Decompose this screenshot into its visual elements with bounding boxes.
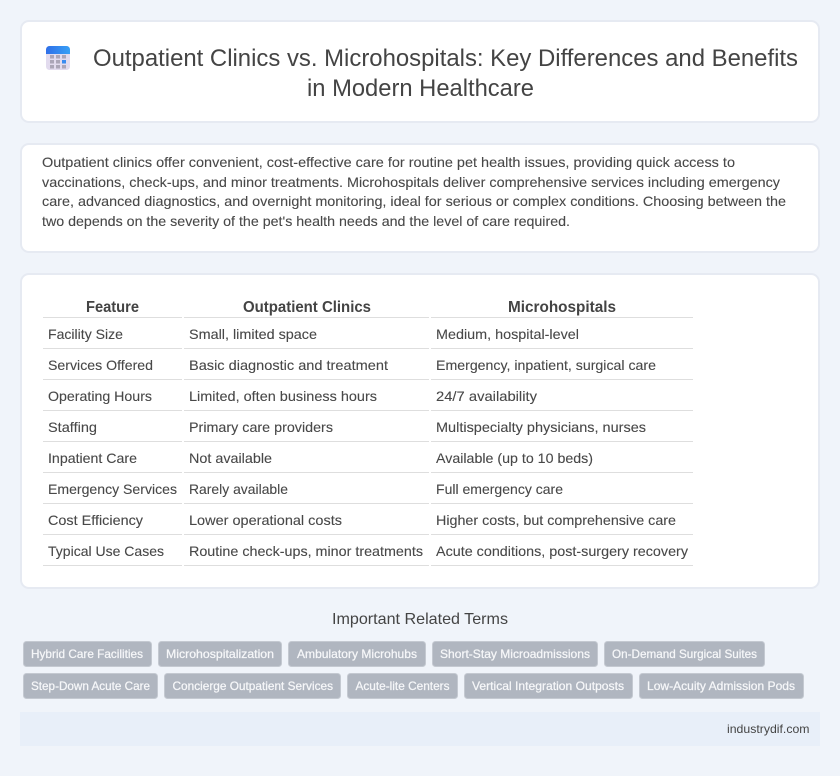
title text: in Modern Healthcare — [307, 75, 534, 102]
row: cost efficiency: Lower operational costs — [189, 512, 342, 528]
tag — [24, 674, 158, 698]
panel: title — [21, 21, 819, 122]
table header: Microhospitals — [508, 299, 616, 316]
row: typical use cases — [43, 543, 693, 566]
row: facility size — [43, 326, 693, 349]
panel: comparison table — [21, 274, 819, 588]
tag — [24, 642, 152, 666]
tag: Hybrid Care Facilities — [31, 647, 143, 661]
table header: Feature — [86, 299, 139, 316]
tag — [348, 674, 458, 698]
title text — [93, 45, 798, 102]
heading: important related terms: Important Related Terms — [332, 611, 508, 628]
panel: description — [21, 144, 819, 252]
description text — [42, 154, 786, 229]
row: operating hours — [43, 388, 693, 411]
row: operating hours: 24/7 availability — [436, 388, 537, 404]
tag: Microhospitalization — [166, 647, 274, 661]
row: services offered — [43, 357, 693, 380]
row: staffing: Staffing — [48, 419, 97, 435]
tag: On-Demand Surgical Suites — [612, 647, 757, 661]
tag: Ambulatory Microhubs — [297, 647, 417, 661]
row: cost efficiency: Higher costs, but comprehensive care — [436, 512, 676, 528]
row: operating hours: Operating Hours — [48, 388, 152, 404]
row: operating hours: Limited, often business hours — [189, 388, 377, 404]
tag — [464, 674, 632, 698]
row: staffing — [43, 419, 693, 442]
row: inpatient care: Not available — [189, 450, 272, 466]
tag — [158, 642, 282, 666]
tag — [288, 642, 426, 666]
row: emergency services — [43, 481, 693, 504]
row: inpatient care: Inpatient Care — [48, 450, 137, 466]
tag — [164, 674, 340, 698]
description text: two depends on the severity of the pet's health needs and the level of care required. — [42, 213, 570, 229]
row: typical use cases: Typical Use Cases — [48, 543, 164, 559]
row: services offered: Emergency, inpatient, surgical care — [436, 357, 656, 373]
footer: industrydif.com — [727, 722, 810, 736]
row: facility size: Small, limited space — [189, 326, 317, 342]
row: typical use cases: Acute conditions, post-surgery recovery — [436, 543, 688, 559]
icon: calendar — [46, 46, 70, 70]
tag: Acute-lite Centers — [356, 679, 450, 693]
row: emergency services: Rarely available — [189, 481, 288, 497]
row: emergency services: Full emergency care — [436, 481, 563, 497]
tag: Concierge Outpatient Services — [172, 679, 333, 693]
row: staffing: Multispecialty physicians, nurses — [436, 419, 646, 435]
tag — [604, 642, 764, 666]
tag: Step-Down Acute Care — [31, 679, 150, 693]
description text: care, advanced diagnostics, and overnight monitoring, ideal for serious or complex conditions. Choosing between the — [42, 193, 786, 209]
table header: Outpatient Clinics — [243, 299, 371, 316]
description text: Outpatient clinics offer convenient, cost-effective care for routine pet health issues, providing quick access to — [42, 154, 735, 170]
row: typical use cases: Routine check-ups, minor treatments — [189, 543, 423, 559]
row: cost efficiency: Cost Efficiency — [48, 512, 143, 528]
table header — [43, 299, 693, 318]
row: emergency services: Emergency Services — [48, 481, 177, 497]
row: services offered: Services Offered — [48, 357, 153, 373]
row: staffing: Primary care providers — [189, 419, 333, 435]
tag — [640, 674, 804, 698]
tag: Vertical Integration Outposts — [472, 679, 624, 693]
tag — [432, 642, 598, 666]
tags: related terms — [24, 642, 804, 698]
row: inpatient care: Available (up to 10 beds) — [436, 450, 593, 466]
title text: Outpatient Clinics vs. Microhospitals: Key Differences and Benefits — [93, 45, 798, 72]
row: inpatient care — [43, 450, 693, 473]
tag: Short-Stay Microadmissions — [440, 647, 590, 661]
footer — [20, 712, 820, 746]
description text: vaccinations, check-ups, and minor treatments. Microhospitals deliver comprehensive services including emergency — [42, 174, 780, 190]
row: services offered: Basic diagnostic and treatment — [189, 357, 388, 373]
row: facility size: Facility Size — [48, 326, 123, 342]
row: facility size: Medium, hospital-level — [436, 326, 579, 342]
row: cost efficiency — [43, 512, 693, 535]
tag: Low-Acuity Admission Pods — [647, 679, 795, 693]
